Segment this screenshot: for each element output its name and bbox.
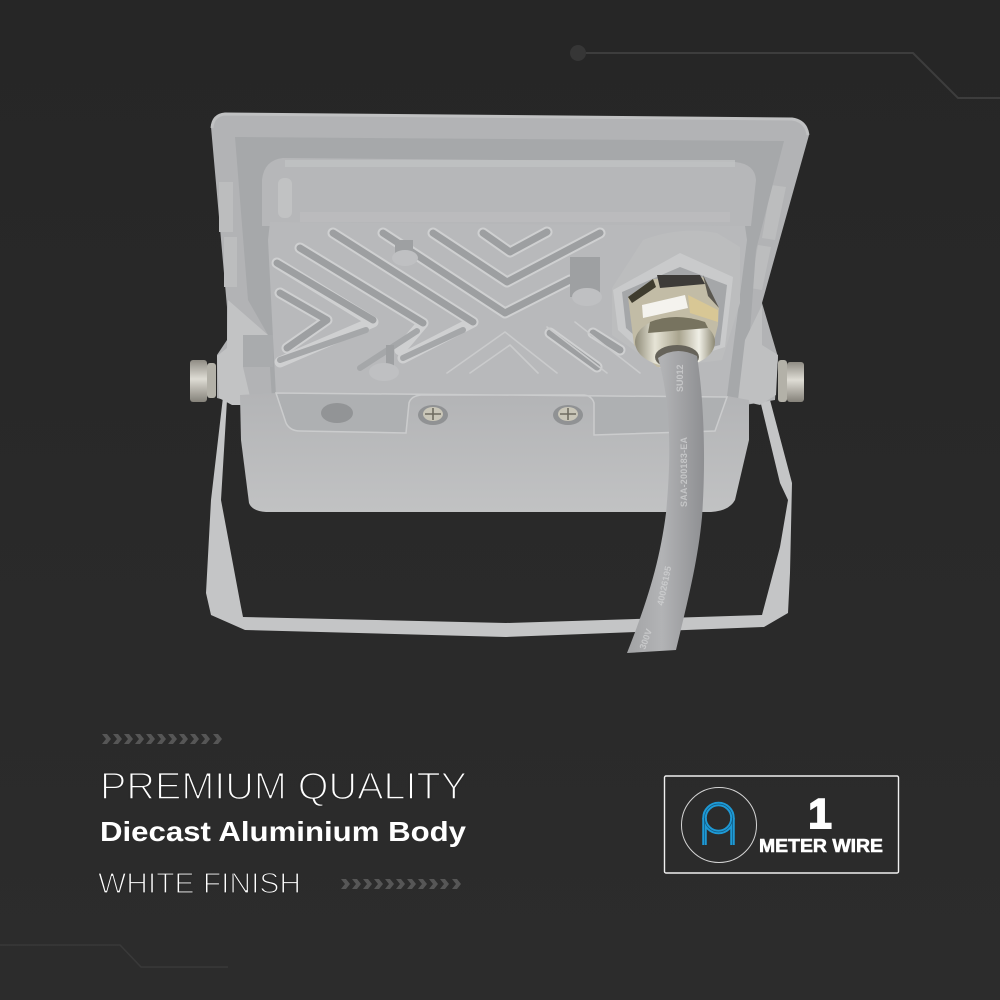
finned plate xyxy=(268,222,747,396)
mounting bracket xyxy=(206,397,792,637)
front frame xyxy=(211,113,809,405)
cover screw right xyxy=(553,405,583,425)
housing side wall xyxy=(240,393,749,512)
housing upper texture band xyxy=(278,160,735,222)
nut details xyxy=(628,275,719,369)
chevron row: lower xyxy=(341,879,461,889)
right hinge lump xyxy=(738,305,778,405)
cable print: SU012 xyxy=(675,364,685,392)
cable print xyxy=(637,364,689,651)
gland hex seat xyxy=(613,253,733,368)
chevron row: upper xyxy=(102,734,222,744)
cover hole xyxy=(321,403,353,423)
label: white finish: WHITE FINISH xyxy=(98,868,301,900)
decorative circuit line: bottom left xyxy=(0,945,228,967)
gland hex seat recess xyxy=(622,267,727,360)
subheading: diecast aluminium body: Diecast Aluminium Body xyxy=(100,816,466,847)
left bolt xyxy=(190,360,216,402)
rear cover plate xyxy=(276,393,727,435)
cover screw left xyxy=(418,405,448,425)
cable print: 40026195 xyxy=(655,565,673,606)
left hinge lump xyxy=(217,300,268,405)
cable gland boss xyxy=(612,231,740,368)
frame notches xyxy=(219,182,786,290)
metal nut xyxy=(628,277,719,368)
frame highlight rim xyxy=(212,114,808,135)
icon: wire coil in circle xyxy=(682,788,756,862)
power cable xyxy=(627,351,704,653)
decorative circuit line: top right xyxy=(570,45,1000,98)
housing upper block xyxy=(262,158,756,226)
heat sink grooves xyxy=(277,232,640,373)
heading: premium quality: PREMIUM QUALITY xyxy=(100,766,467,808)
left hinge block xyxy=(243,335,273,367)
cable print: SAA-200183-EA xyxy=(679,436,689,507)
cable print: 300V xyxy=(637,628,654,651)
screw pegs xyxy=(369,240,602,381)
right bolt xyxy=(778,360,804,402)
number 1: 1 xyxy=(808,790,832,837)
product: floodlight rear view xyxy=(190,113,809,653)
frame inner recess xyxy=(235,137,784,400)
badge: 1 meter wire xyxy=(664,776,898,873)
label: meter wire: METER WIRE xyxy=(759,835,883,856)
